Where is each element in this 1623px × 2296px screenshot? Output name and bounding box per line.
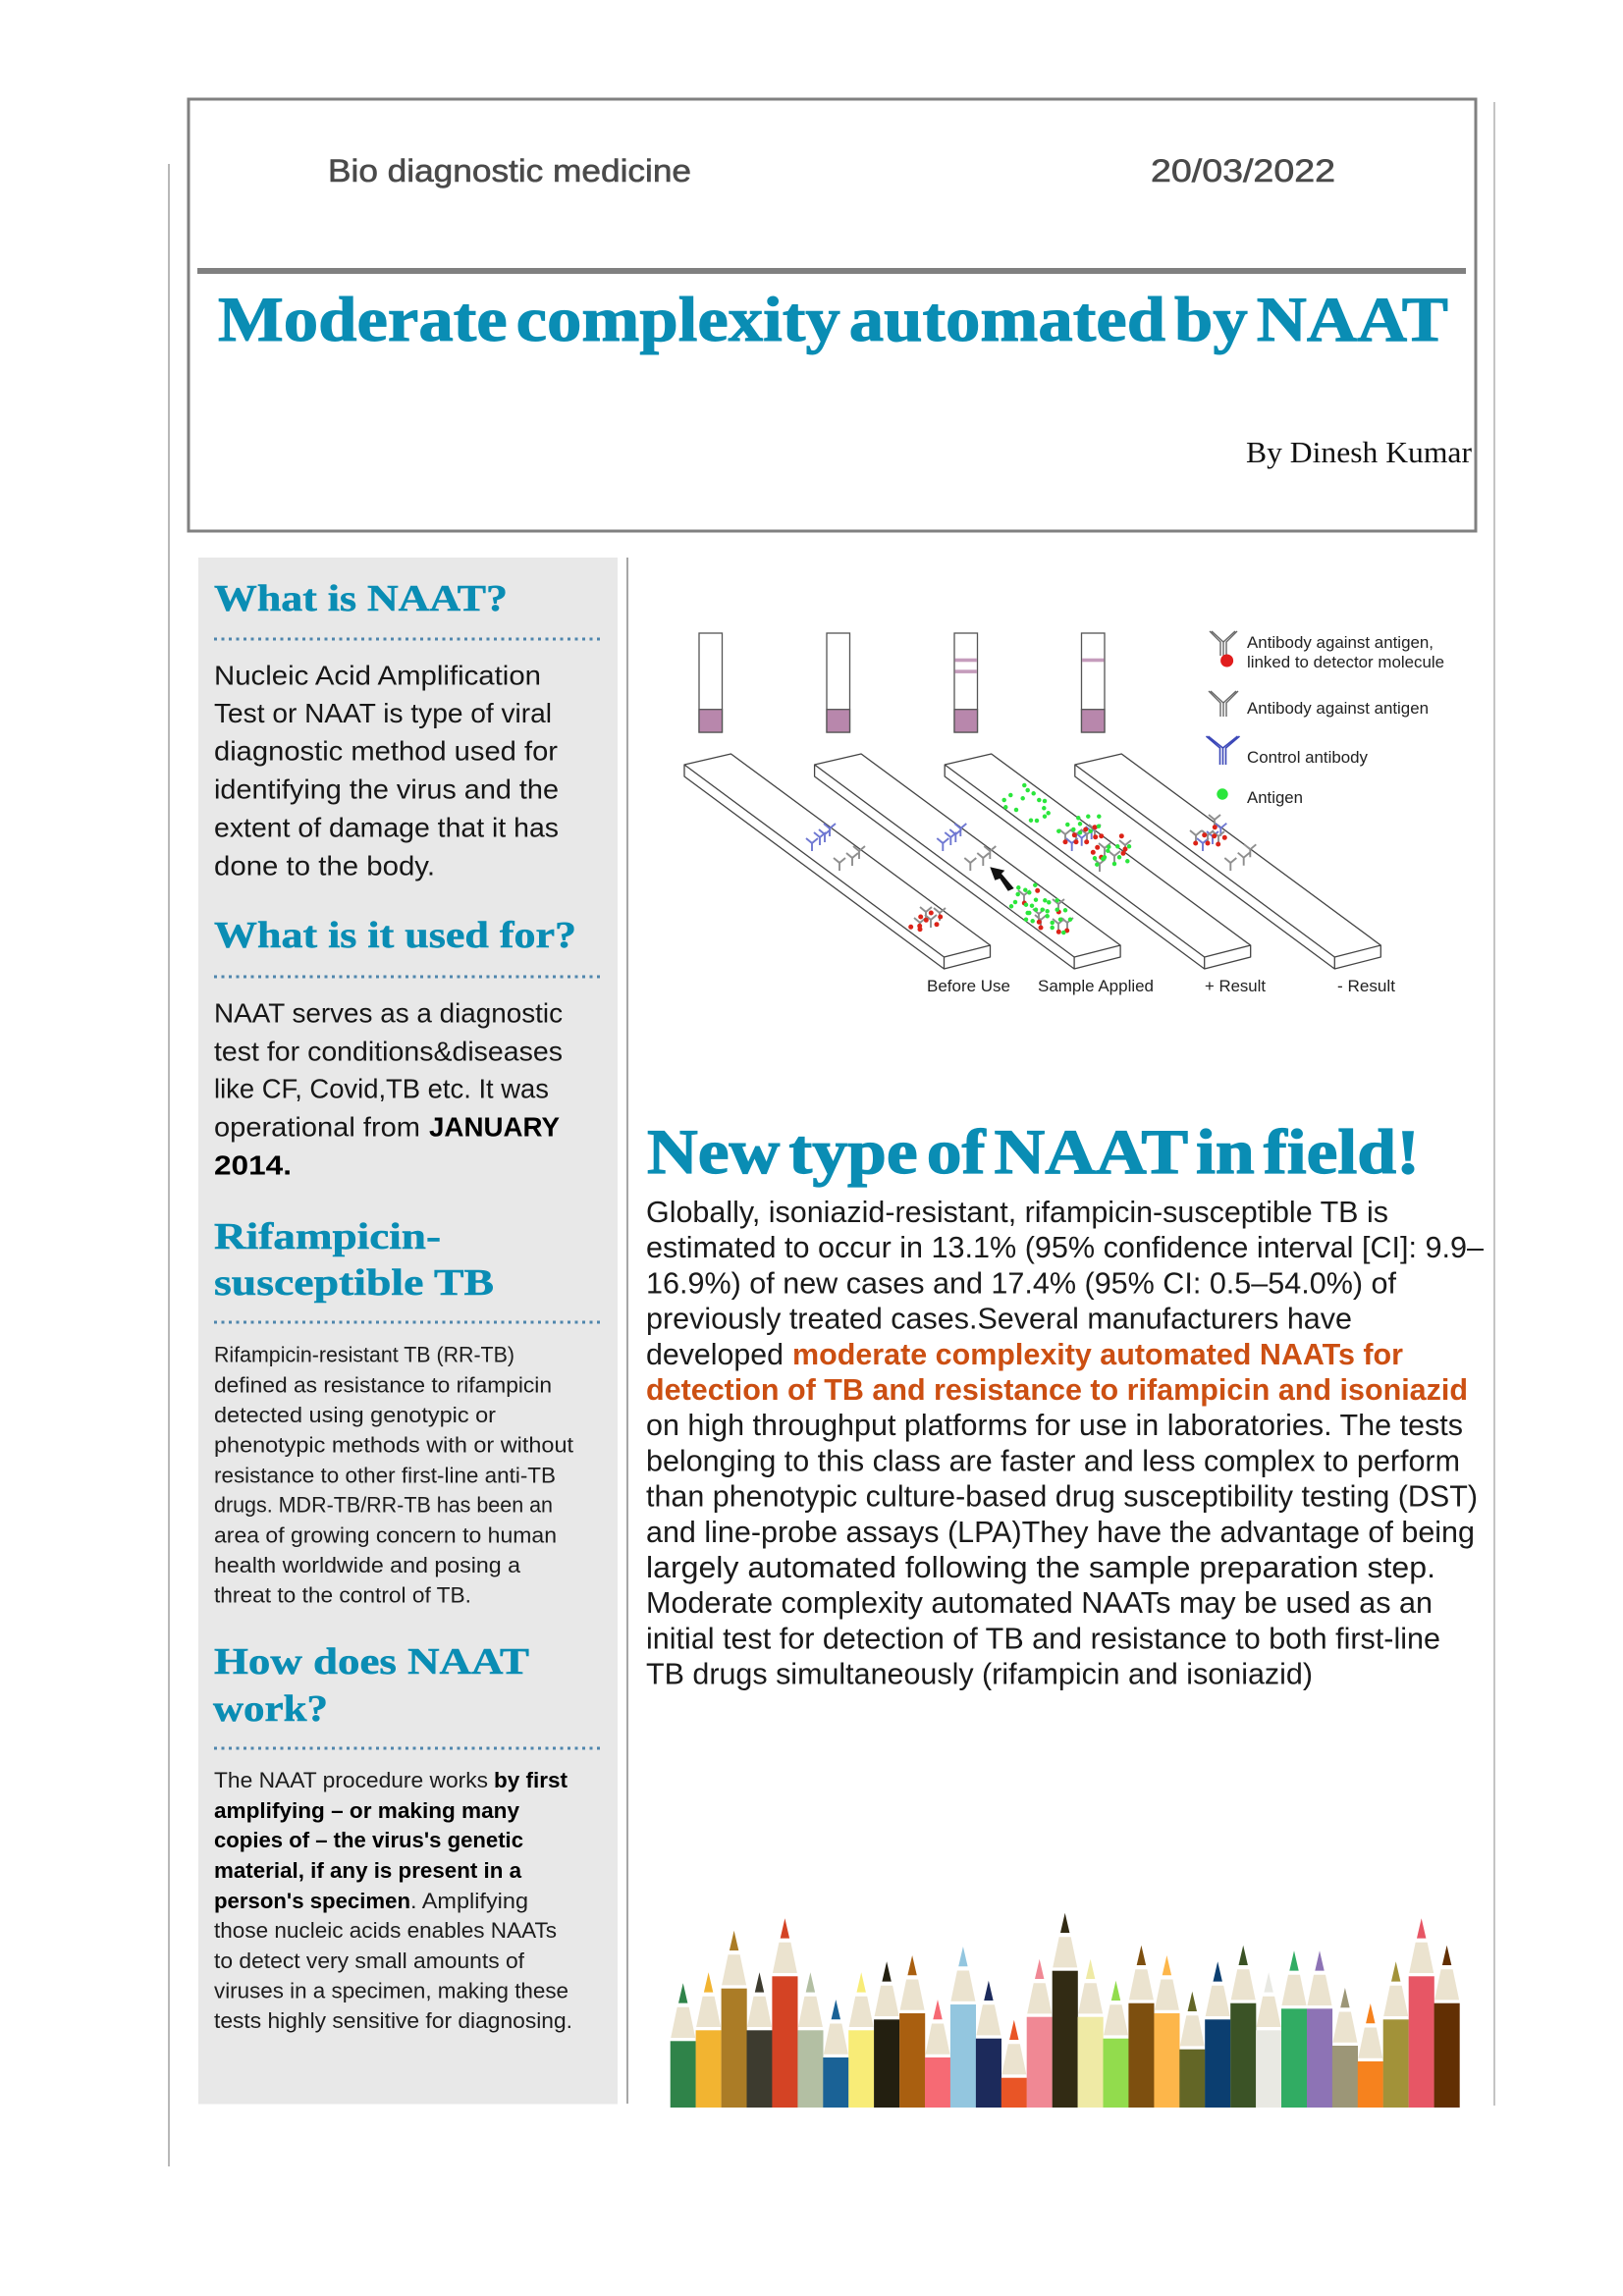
main paragraph: developed bbox=[646, 1337, 784, 1371]
author: By Dinesh Kumar bbox=[1246, 435, 1473, 469]
heading: new type of NAAT: New type of NAAT in field! bbox=[647, 1117, 1420, 1188]
text: how does NAAT work: tests highly sensitive for diagnosing. bbox=[214, 2008, 572, 2033]
text: what is NAAT: identifying the virus and the bbox=[214, 774, 559, 805]
text: how does NAAT work: material, if any is present in a bbox=[214, 1858, 522, 1883]
stage labels: Sample Applied bbox=[1038, 977, 1154, 995]
legend: linked to detector molecule bbox=[1247, 653, 1444, 671]
main paragraph: moderate complexity automated NAATs for bbox=[792, 1337, 1403, 1371]
heading: what is NAAT: What is NAAT? bbox=[214, 578, 508, 619]
text: rifampicin: threat to the control of TB. bbox=[214, 1583, 471, 1608]
text: how does NAAT work: those nucleic acids enables NAATs bbox=[214, 1918, 557, 1943]
main paragraph: detection of TB and resistance to rifampicin and isoniazid bbox=[646, 1372, 1468, 1407]
text: what is it used for: like CF, Covid,TB etc. It was bbox=[214, 1074, 549, 1104]
text: what is NAAT: done to the body. bbox=[214, 851, 435, 881]
heading: what is it used for: What is it used for? bbox=[214, 915, 576, 956]
legend bbox=[1206, 631, 1444, 807]
stage labels: Before Use bbox=[927, 977, 1010, 995]
text: rifampicin: resistance to other first-line anti-TB bbox=[214, 1464, 556, 1488]
main paragraph: and line-probe assays (LPA)They have the advantage of being bbox=[646, 1515, 1475, 1549]
title: Moderate complexity automated by NAAT bbox=[218, 285, 1448, 355]
text: how does NAAT work: viruses in a specimen, making these bbox=[214, 1979, 568, 2002]
test cassettes bbox=[684, 754, 1380, 969]
main paragraph: previously treated cases.Several manufacturers have bbox=[646, 1302, 1352, 1336]
text: what is it used for: operational from bbox=[214, 1112, 420, 1143]
text: what is NAAT: Nucleic Acid Amplification bbox=[214, 660, 541, 690]
text: rifampicin: defined as resistance to rifampicin bbox=[214, 1373, 552, 1398]
text: how does NAAT work: amplifying – or making many bbox=[214, 1798, 520, 1823]
main paragraph: on high throughput platforms for use in laboratories. The tests bbox=[646, 1408, 1463, 1442]
main paragraph: Globally, isoniazid-resistant, rifampicin-susceptible TB is bbox=[646, 1195, 1388, 1229]
heading: how does NAAT work bbox=[213, 1641, 529, 1730]
text: rifampicin: drugs. MDR-TB/RR-TB has been an bbox=[214, 1493, 553, 1518]
main paragraph: largely automated following the sample preparation step. bbox=[646, 1550, 1435, 1584]
subject label: Bio diagnostic medicine bbox=[328, 153, 691, 188]
text: what is it used for: JANUARY bbox=[429, 1112, 560, 1143]
legend: Control antibody bbox=[1247, 748, 1368, 767]
text: how does NAAT work: . Amplifying bbox=[410, 1889, 528, 1913]
heading: rifampicin-susceptible TB bbox=[214, 1216, 494, 1304]
main paragraph: estimated to occur in 13.1% (95% confidence interval [CI]: 9.9– bbox=[646, 1230, 1485, 1264]
main paragraph: TB drugs simultaneously (rifampicin and isoniazid) bbox=[646, 1657, 1313, 1691]
text: what is it used for: NAAT serves as a diagnostic bbox=[214, 998, 563, 1029]
main paragraph: Moderate complexity automated NAATs may be used as an bbox=[646, 1585, 1433, 1620]
control antibodies bbox=[806, 824, 1226, 851]
main paragraph: initial test for detection of TB and resistance to both first-line bbox=[646, 1621, 1440, 1655]
diagram: lateral flow test bbox=[684, 631, 1444, 995]
text: rifampicin: area of growing concern to human bbox=[214, 1523, 557, 1548]
text: how does NAAT work: The NAAT procedure works bbox=[214, 1768, 488, 1792]
legend: Antibody against antigen, bbox=[1247, 633, 1434, 652]
text: what is NAAT: diagnostic method used for bbox=[214, 736, 558, 767]
text: how does NAAT work: copies of – the virus's genetic bbox=[214, 1828, 523, 1852]
date: 20/03/2022 bbox=[1151, 153, 1335, 188]
heading: rifampicin-susceptible TB: Rifampicin- bbox=[214, 1216, 441, 1257]
text: rifampicin: Rifampicin-resistant TB (RR-TB) bbox=[214, 1343, 514, 1367]
main paragraph: 16.9%) of new cases and 17.4% (95% CI: 0.5–54.0%) of bbox=[646, 1265, 1396, 1300]
legend: Antibody against antigen bbox=[1247, 699, 1429, 718]
illustration: coloured pencils bbox=[671, 1913, 1460, 2108]
text: what is NAAT: extent of damage that it has bbox=[214, 813, 559, 843]
main paragraph bbox=[646, 1195, 1485, 1691]
readout strips bbox=[699, 633, 1105, 732]
text: what is it used for: test for conditions&diseases bbox=[214, 1037, 563, 1067]
text: rifampicin: detected using genotypic or bbox=[214, 1403, 496, 1427]
text: what is it used for bbox=[214, 998, 563, 1181]
heading: how does NAAT work: work? bbox=[213, 1688, 328, 1730]
panel: sidebar bbox=[198, 558, 618, 2105]
text: how does NAAT work: by first bbox=[494, 1768, 568, 1792]
arrow bbox=[990, 867, 1014, 891]
text: rifampicin bbox=[214, 1343, 573, 1608]
stage labels: - Result bbox=[1337, 977, 1395, 995]
stage labels bbox=[927, 977, 1395, 995]
heading: how does NAAT work: How does NAAT bbox=[214, 1641, 529, 1682]
main paragraph: belonging to this class are faster and less complex to perform bbox=[646, 1443, 1460, 1477]
text: what is NAAT bbox=[214, 660, 559, 881]
text: what is it used for: 2014. bbox=[214, 1150, 292, 1181]
legend: Antigen bbox=[1247, 788, 1303, 807]
text: how does NAAT work: to detect very small amounts of bbox=[214, 1949, 525, 1973]
header panel bbox=[189, 99, 1476, 531]
text: rifampicin: phenotypic methods with or without bbox=[214, 1433, 573, 1458]
stage labels: + Result bbox=[1205, 977, 1266, 995]
test line antibodies bbox=[834, 815, 1256, 932]
heading: rifampicin-susceptible TB: susceptible TB bbox=[214, 1262, 494, 1304]
detector dots bbox=[911, 828, 1224, 932]
text: what is NAAT: Test or NAAT is type of viral bbox=[214, 698, 552, 728]
text: how does NAAT work: person's specimen bbox=[214, 1889, 410, 1913]
text: rifampicin: health worldwide and posing a bbox=[214, 1553, 521, 1577]
antigen dots bbox=[1004, 785, 1129, 933]
main paragraph: than phenotypic culture-based drug susceptibility testing (DST) bbox=[646, 1479, 1478, 1514]
text: how does NAAT work bbox=[214, 1768, 572, 2033]
